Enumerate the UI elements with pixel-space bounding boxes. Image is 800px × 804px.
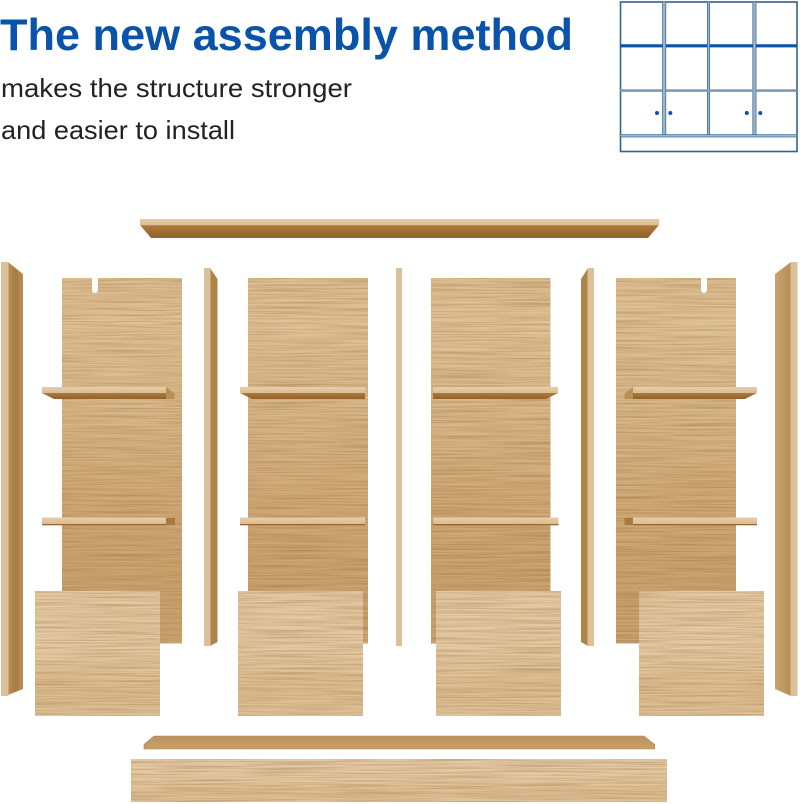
- top board: [140, 219, 659, 238]
- door 1: [35, 591, 160, 716]
- plinth board: [144, 736, 655, 749]
- back panel 4: [616, 277, 736, 644]
- shelf 1 lower: [42, 518, 175, 525]
- shelf 4 upper: [624, 387, 757, 399]
- subtitle line 2: and easier to install: [1, 115, 235, 145]
- shelf 3 upper: [433, 387, 558, 399]
- door 4: [639, 591, 764, 716]
- back panel 2: [248, 278, 368, 644]
- left side board: [1, 262, 23, 696]
- subtitle line 1: makes the structure stronger: [1, 73, 352, 103]
- divider 1: [204, 268, 218, 646]
- back panel 1: [62, 277, 182, 644]
- door 2: [238, 591, 363, 716]
- title: The new assembly method: [0, 11, 573, 60]
- shelf 2 upper: [240, 387, 365, 399]
- back panel 3: [431, 278, 550, 644]
- door 3: [436, 591, 561, 716]
- right side board: [775, 262, 798, 696]
- divider 3: [581, 268, 594, 646]
- shelf 3 lower: [434, 518, 558, 525]
- shelf 2 lower: [240, 518, 365, 525]
- shelf 4 lower: [624, 518, 757, 525]
- icon: assembled cabinet outline: [620, 2, 797, 152]
- bottom board: [131, 759, 667, 802]
- centre divider: [396, 268, 402, 646]
- shelf 1 upper: [42, 387, 174, 399]
